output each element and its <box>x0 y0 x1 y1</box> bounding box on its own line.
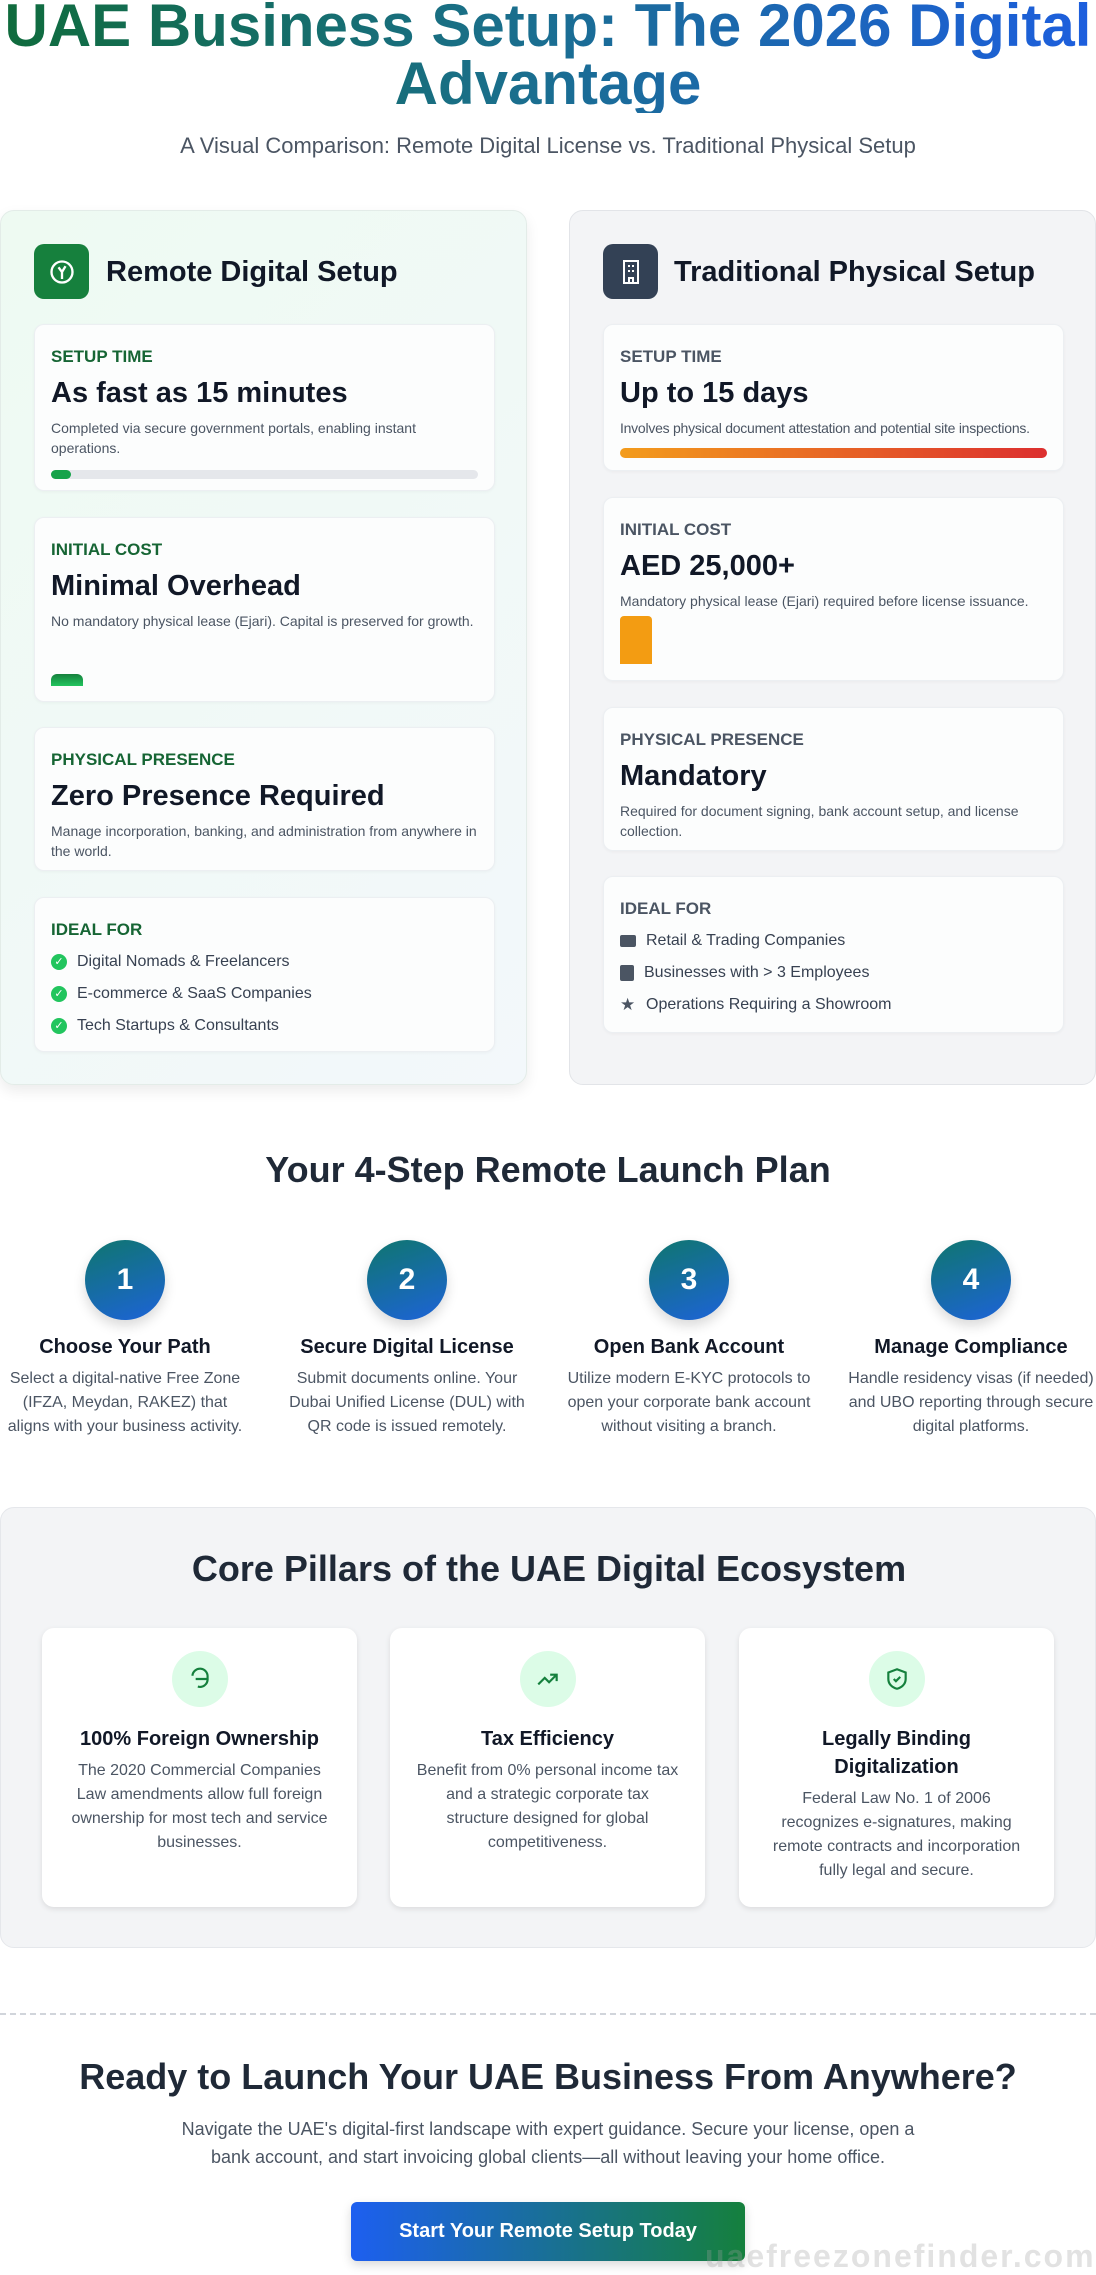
card: setup time: SETUP TIME <box>51 347 153 366</box>
card: ideal for <box>34 897 495 1052</box>
card: physical presence <box>603 707 1064 851</box>
card: setup time: Involves physical document attestation and potential site inspections. <box>620 420 1030 436</box>
card: ideal for: ✓ <box>54 956 64 968</box>
card: initial cost <box>603 497 1064 681</box>
card: ideal for: IDEAL FOR <box>620 899 711 918</box>
card: ideal for: E-commerce & SaaS Companies <box>77 985 312 1002</box>
card: ideal for <box>603 876 1064 1033</box>
step 2: Submit documents online. Your Dubai Unified License (DUL) with QR code is issued remotely. <box>289 1370 525 1435</box>
heading: Remote Digital Setup <box>106 256 398 288</box>
card: ideal for: Retail & Trading Companies <box>646 932 845 949</box>
step 2: Secure Digital License <box>300 1336 514 1358</box>
card: ideal for: Businesses with > 3 Employees <box>644 964 869 981</box>
pillar: legal: Legally Binding <box>822 1728 971 1750</box>
pillar: ownership <box>42 1628 357 1907</box>
step 3: Open Bank Account <box>594 1336 784 1358</box>
card: setup time: SETUP TIME <box>620 347 722 366</box>
button: Start Your Remote Setup Today <box>399 2220 697 2242</box>
heading: Traditional Physical Setup <box>674 256 1035 288</box>
panel: traditional physical setup <box>569 210 1096 1085</box>
watermark: uaefreezonefinder.com <box>705 2238 1096 2274</box>
pillar: tax: Tax Efficiency <box>481 1728 614 1750</box>
step 2: 2 <box>399 1263 415 1296</box>
pillar: tax: Benefit from 0% personal income tax and a strategic corporate tax structure designed for global competitiveness. <box>417 1762 678 1851</box>
step 1 <box>8 1240 242 1435</box>
card: physical presence: PHYSICAL PRESENCE <box>51 750 235 769</box>
panel: core pillars <box>0 1507 1096 1948</box>
step 2 <box>289 1240 525 1435</box>
steps <box>8 1240 1094 1435</box>
icon: building <box>603 244 658 299</box>
card: ideal for: Operations Requiring a Showroom <box>646 996 891 1013</box>
step 3: Utilize modern E-KYC protocols to open your corporate bank account without visiting a branch. <box>568 1370 810 1435</box>
step 4: Handle residency visas (if needed) and UBO reporting through secure digital platforms. <box>848 1370 1094 1435</box>
card: setup time: As fast as 15 minutes <box>51 377 348 409</box>
card: ideal for: ✓ <box>54 988 64 1000</box>
card: initial cost <box>34 517 495 702</box>
step 1: Select a digital-native Free Zone (IFZA, Meydan, RAKEZ) that aligns with your business activity. <box>8 1370 242 1435</box>
pillar: ownership: 100% Foreign Ownership <box>80 1728 319 1750</box>
card: ideal for: ★ <box>620 995 635 1014</box>
card: initial cost: INITIAL COST <box>51 540 162 559</box>
card: setup time: Up to 15 days <box>620 377 809 409</box>
pillar: tax <box>390 1628 705 1907</box>
card: physical presence: Manage incorporation, banking, and administration from anywhere in the world. <box>51 823 477 859</box>
pillar: legal: Federal Law No. 1 of 2006 <box>802 1790 991 1807</box>
step 1: Choose Your Path <box>39 1336 211 1358</box>
step 4: 4 <box>963 1263 979 1296</box>
card: ideal for: IDEAL FOR <box>51 920 142 939</box>
heading: Core Pillars of the UAE Digital Ecosystem <box>192 1548 906 1589</box>
panel: remote digital setup <box>0 210 527 1085</box>
card: physical presence: Mandatory <box>620 760 767 792</box>
pillar: ownership: The 2020 Commercial Companies Law amendments allow full foreign ownership for most tech and service businesses. <box>71 1762 328 1851</box>
card: ideal for: Tech Startups & Consultants <box>77 1017 279 1034</box>
card: ideal for: Digital Nomads & Freelancers <box>77 953 290 970</box>
card: physical presence: Zero Presence Required <box>51 780 385 812</box>
step 4: Manage Compliance <box>874 1336 1068 1358</box>
card: initial cost: INITIAL COST <box>620 520 731 539</box>
icon: plant <box>34 244 89 299</box>
pillar: legal <box>739 1628 1054 1907</box>
card: setup time <box>34 324 495 491</box>
card: setup time <box>603 324 1064 471</box>
step 1: 1 <box>117 1263 133 1296</box>
pillar: legal: Digitalization <box>834 1756 959 1778</box>
card: initial cost: No mandatory physical lease (Ejari). Capital is preserved for growth. <box>51 613 474 629</box>
button <box>351 2202 745 2261</box>
heading: 4-step plan: Your 4-Step Remote Launch Plan <box>265 1149 831 1190</box>
subtitle: A Visual Comparison: Remote Digital License vs. Traditional Physical Setup <box>180 133 916 158</box>
card: initial cost: AED 25,000+ <box>620 550 795 582</box>
card: ideal for: ✓ <box>54 1020 64 1032</box>
step 3 <box>568 1240 810 1435</box>
card: physical presence <box>34 727 495 871</box>
cta text: Navigate the UAE's digital-first landscape with expert guidance. Secure your license, open a bank account, and start invoicing global clients—all without leaving your home office. <box>182 2119 914 2167</box>
card: initial cost: Minimal Overhead <box>51 570 301 602</box>
card: physical presence: Required for document signing, bank account setup, and license collection. <box>620 803 1018 839</box>
cta heading: Ready to Launch Your UAE Business From Anywhere? <box>79 2056 1017 2097</box>
card: setup time: Completed via secure government portals, enabling instant operations. <box>51 420 416 456</box>
card: initial cost: Mandatory physical lease (Ejari) required before license issuance. <box>620 593 1029 609</box>
step 3: 3 <box>681 1263 697 1296</box>
pillar: legal: recognizes e-signatures, making remote contracts and incorporation fully legal and secure. <box>773 1814 1020 1879</box>
card: physical presence: PHYSICAL PRESENCE <box>620 730 804 749</box>
step 4 <box>848 1240 1094 1435</box>
